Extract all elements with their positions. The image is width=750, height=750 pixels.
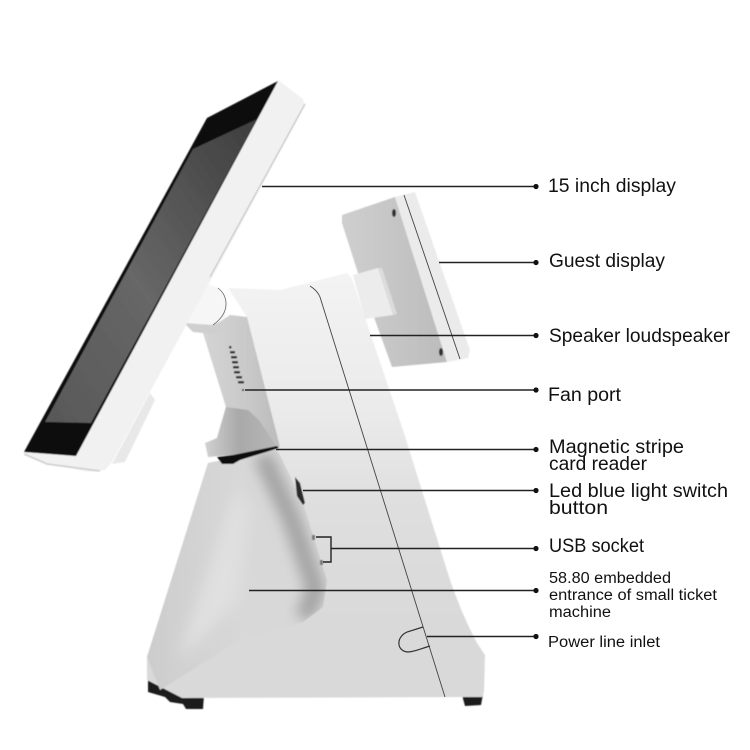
guest display edge (395, 192, 470, 362)
seam line (310, 286, 445, 697)
label: fan port: Fan port (548, 385, 622, 406)
label: power line inlet: Power line inlet (548, 634, 661, 651)
line: guest display (439, 262, 535, 264)
guest display seam (404, 195, 460, 359)
line: card reader (276, 448, 535, 450)
front base wedge (147, 449, 327, 690)
label: USB socket: USB socket (549, 536, 645, 557)
label: 15 inch display: 15 inch display (548, 176, 676, 197)
USB sockets (312, 535, 323, 565)
line: power inlet (427, 636, 535, 638)
line: USB bracket (316, 537, 535, 562)
label: LED switch button (549, 481, 728, 519)
monitor bezel (24, 80, 305, 472)
label: guest display: Guest display (549, 251, 665, 272)
leader dots (533, 184, 539, 639)
line: speaker (370, 334, 535, 336)
line: fan port (245, 389, 535, 391)
label: ticket machine entrance: entrance of small ticket (549, 587, 718, 604)
neck with fan port panel (203, 315, 280, 447)
monitor screen (45, 119, 257, 423)
LED switch button (295, 477, 305, 505)
label: ticket machine entrance (549, 570, 718, 621)
label: magnetic stripe card reader: card reader (549, 454, 648, 475)
labels (548, 176, 731, 651)
power line inlet (399, 627, 430, 652)
fan vents (229, 346, 244, 391)
label: ticket machine entrance: machine (549, 604, 611, 621)
card reader slot (217, 446, 279, 464)
body column and base (147, 273, 485, 698)
POS machine illustration (24, 80, 485, 709)
line: 15 inch display (262, 186, 535, 188)
base recess shading (262, 455, 316, 618)
label: magnetic stripe card reader (549, 437, 684, 475)
hinge arc (213, 288, 226, 325)
label: magnetic stripe card reader: Magnetic stripe (549, 437, 684, 458)
guest display back (342, 197, 447, 367)
guest display arm (353, 268, 393, 319)
monitor hinge (183, 283, 228, 325)
label: ticket machine entrance: 58.80 embedded (549, 570, 671, 587)
stand feet (148, 678, 483, 709)
line: LED switch (303, 490, 535, 492)
monitor bezel edge (210, 104, 305, 277)
card reader (205, 407, 277, 457)
label: LED switch button: Led blue light switch (549, 481, 728, 502)
label: speaker: Speaker loudspeaker (549, 326, 731, 347)
line: ticket machine (249, 590, 535, 592)
label: LED switch button: button (549, 498, 608, 519)
product diagram (24, 80, 730, 710)
guest display screws (392, 209, 443, 356)
monitor glass (24, 81, 278, 456)
monitor rear bump (112, 393, 155, 464)
leader lines (245, 186, 535, 636)
base light facet (178, 490, 248, 660)
